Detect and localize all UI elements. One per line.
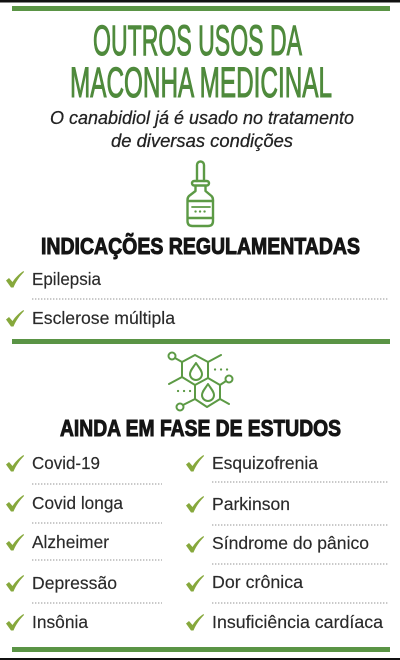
subtitle: O canabidiol já é usado no tratamento [50,108,354,128]
heading: ainda em fase de estudos: AINDA EM FASE DE ESTUDOS [60,415,341,441]
item: Covid longa: Covid longa [32,493,123,513]
item: Insônia [6,612,88,632]
icon: molecule with drops [168,352,232,410]
subtitle: de diversas condições [111,131,293,151]
list: indicações [6,269,388,328]
title [70,17,332,107]
icon: dropper bottle [188,162,213,226]
item: Covid-19: Covid-19 [32,453,100,473]
item: Insuficiência cardíaca: Insuficiência cardíaca [212,612,383,632]
item: Parkinson: Parkinson [212,494,290,514]
list: estudos, left column [6,453,162,632]
item: Insônia: Insônia [32,612,88,632]
item: Esclerose múltipla: Esclerose múltipla [32,308,175,328]
item: Síndrome do pânico: Síndrome do pânico [212,533,369,553]
item: Alzheimer: Alzheimer [32,532,109,552]
item: Epilepsia: Epilepsia [32,269,101,289]
list: estudos, right column [186,453,388,632]
item: Esquizofrenia: Esquizofrenia [212,453,318,473]
subtitle [50,108,354,151]
item: Depressão: Depressão [32,573,117,593]
item: Dor crônica: Dor crônica [212,572,303,592]
